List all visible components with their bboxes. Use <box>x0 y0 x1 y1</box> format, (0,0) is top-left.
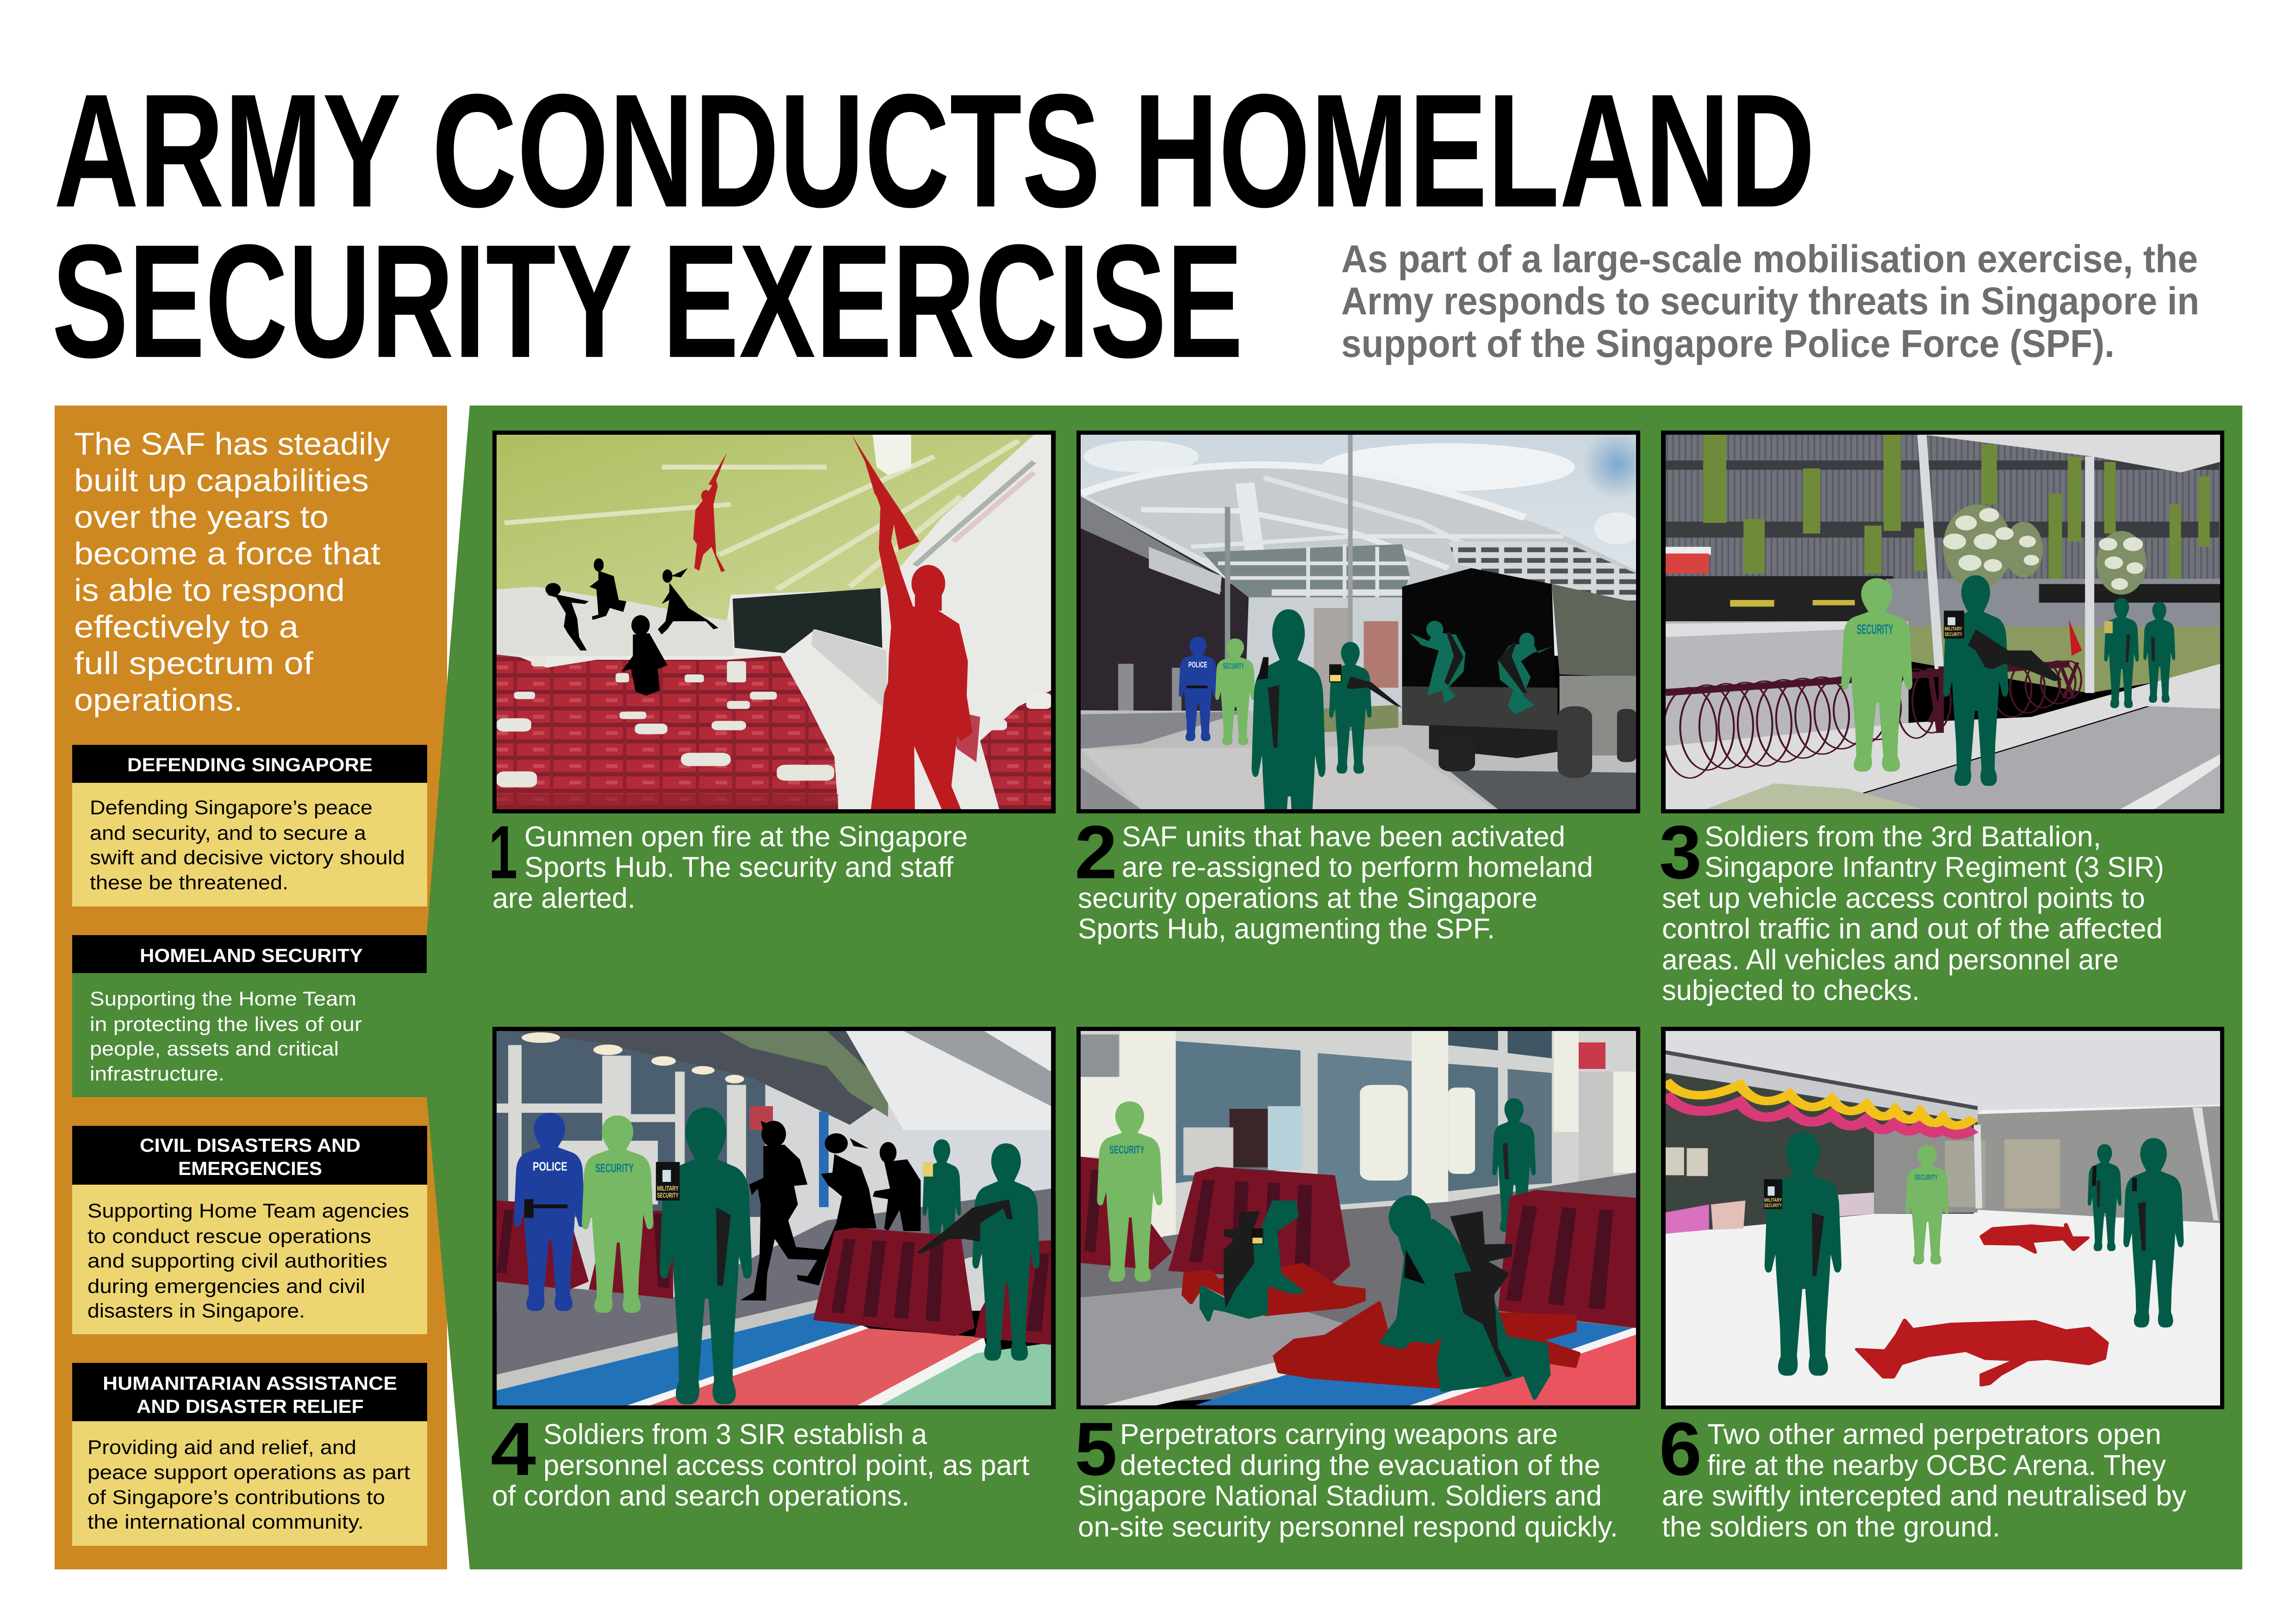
barriers <box>497 1200 1051 1345</box>
caption 1 <box>492 821 968 914</box>
card body: to conduct rescue operations <box>87 1225 371 1248</box>
figure: police officer: POLICE <box>1188 660 1207 669</box>
figure: background soldier <box>2088 1144 2122 1251</box>
figure: security officer <box>1842 578 1912 772</box>
caption 2 <box>1078 821 1593 945</box>
step number 6: 6 <box>1659 1406 1702 1491</box>
title: SECURITY EXERCISE <box>52 211 1243 391</box>
figure: security officer <box>582 1116 653 1313</box>
card heading: DEFENDING SINGAPORE <box>127 754 373 775</box>
figure: police officer <box>1179 637 1217 741</box>
card body: during emergencies and civil <box>87 1275 365 1298</box>
card body: Supporting Home Team agencies <box>87 1200 409 1222</box>
figures: subdued perpetrator and soldier, small <box>1183 1202 1364 1320</box>
card heading: AND DISASTER RELIEF <box>137 1396 364 1417</box>
panel: step 4 <box>481 1018 1083 1512</box>
card body: swift and decisive victory should <box>90 847 405 869</box>
barriers <box>1081 1156 1636 1328</box>
figure: soldier with armband: SECURITY <box>1764 1203 1782 1208</box>
caption 6: fire at the nearby OCBC Arena. They <box>1707 1449 2166 1481</box>
figure: soldier foreground <box>1251 609 1325 900</box>
figure: soldier with rifle: SECURITY <box>1945 631 1962 637</box>
scene: personnel access control point <box>481 1018 1083 1405</box>
panel: step 2 <box>1064 417 1666 945</box>
caption 6: Two other armed perpetrators open <box>1707 1418 2161 1450</box>
card body: peace support operations as part <box>87 1462 410 1484</box>
card: defending Singapore <box>72 745 427 906</box>
step number 3: 3 <box>1659 810 1702 894</box>
figure: near gunman with rifle <box>852 435 972 809</box>
caption 3: set up vehicle access control points to <box>1662 882 2145 914</box>
step number 2: 2 <box>1075 810 1117 894</box>
card body: of Singapore’s contributions to <box>87 1487 385 1509</box>
panel: step 5 <box>1064 1018 1666 1543</box>
card body <box>90 988 362 1085</box>
card body: people, assets and critical <box>90 1038 339 1060</box>
card body: infrastructure. <box>90 1063 224 1085</box>
card body <box>87 1200 409 1322</box>
figure: soldier with armband: MILITARY <box>1764 1197 1782 1203</box>
figure: background soldier <box>1492 1098 1536 1232</box>
intro text <box>74 426 390 718</box>
panel: step 1 <box>492 431 1056 908</box>
figure: police officer <box>514 1113 585 1311</box>
card: civil disasters and emergencies <box>72 1126 427 1334</box>
step number 1: 1 <box>489 810 517 894</box>
card heading: HOMELAND SECURITY <box>140 945 363 966</box>
card: homeland security <box>72 935 427 1097</box>
card body: these be threatened. <box>90 872 288 894</box>
icon: red flag <box>2069 620 2082 656</box>
card heading: EMERGENCIES <box>178 1158 322 1179</box>
panel: SAF capabilities sidebar <box>55 406 447 1569</box>
figures: fleeing civilians <box>545 558 718 696</box>
figure: security officer <box>1905 1145 1949 1264</box>
subtitle: As part of a large-scale mobilisation exercise, the <box>1341 237 2198 281</box>
scene: perpetrators detected at stadium <box>1064 1018 1666 1405</box>
figure: security officer: SECURITY <box>1857 622 1893 637</box>
caption 4: of cordon and search operations. <box>492 1480 909 1512</box>
card body: Supporting the Home Team <box>90 988 356 1010</box>
scene: soldiers deploying from truck at stadium <box>1064 417 1666 900</box>
scene: vehicle access control point <box>1648 417 2269 809</box>
figure: soldier with rifle: MILITARY <box>1945 626 1962 632</box>
figure: far gunman <box>693 452 727 572</box>
figures: subdued perpetrator and soldier, large <box>1275 1195 1579 1399</box>
caption 1: are alerted. <box>492 882 635 914</box>
subtitle: support of the Singapore Police Force (SPF). <box>1341 322 2115 365</box>
caption 4: Soldiers from 3 SIR establish a <box>543 1418 927 1450</box>
figure: soldier right <box>2123 1138 2184 1328</box>
figure: police officer: POLICE <box>533 1159 567 1173</box>
intro text: become a force that <box>74 536 380 571</box>
figure: soldier with rifle <box>917 1143 1040 1361</box>
subtitle <box>1341 237 2199 365</box>
card body: the international community. <box>87 1511 364 1533</box>
panel: step 6 <box>1648 1018 2249 1543</box>
figure: security officer: SECURITY <box>1223 662 1244 671</box>
panel: main green background <box>427 406 2242 1569</box>
caption 2: SAF units that have been activated <box>1122 821 1565 853</box>
card heading <box>140 1135 361 1179</box>
caption 3: control traffic in and out of the affected <box>1662 913 2163 945</box>
caption 2: security operations at the Singapore <box>1078 882 1537 914</box>
figure: security officer <box>1097 1101 1163 1282</box>
figure: soldier foreground: SECURITY <box>657 1191 678 1199</box>
barrier: central <box>813 1228 974 1336</box>
intro text: The SAF has steadily <box>74 426 390 462</box>
caption 5 <box>1078 1418 1618 1543</box>
figure: soldier foreground <box>656 1107 752 1405</box>
caption 2: are re-assigned to perform homeland <box>1122 851 1593 883</box>
intro text: is able to respond <box>74 573 345 608</box>
trees <box>1943 504 2147 595</box>
card heading: HUMANITARIAN ASSISTANCE <box>103 1373 397 1394</box>
intro text: full spectrum of <box>74 646 313 681</box>
card body: Providing aid and relief, and <box>87 1437 356 1459</box>
figures: evacuating civilians <box>740 1121 921 1301</box>
figure: security officer: SECURITY <box>1109 1143 1145 1156</box>
card body: disasters in Singapore. <box>87 1300 305 1322</box>
figure: soldier with armband <box>1764 1132 1842 1376</box>
caption 3: areas. All vehicles and personnel are <box>1662 944 2119 976</box>
figure: security officer: SECURITY <box>595 1161 634 1175</box>
caption 6: the soldiers on the ground. <box>1662 1511 2000 1543</box>
figure: security officer: SECURITY <box>1915 1173 1938 1181</box>
caption 3 <box>1662 821 2164 1006</box>
figure: soldier foreground: MILITARY <box>657 1184 678 1192</box>
card heading: CIVIL DISASTERS AND <box>140 1135 361 1156</box>
caption 5: detected during the evacuation of the <box>1120 1449 1600 1481</box>
subtitle: Army responds to security threats in Singapore in <box>1341 279 2199 323</box>
caption 3: subjected to checks. <box>1662 974 1920 1006</box>
figure: neutralised perpetrator far <box>1981 1224 2088 1252</box>
card body: Defending Singapore’s peace <box>90 797 373 819</box>
figures: soldiers jumping from truck <box>1410 621 1552 714</box>
caption 3: Soldiers from the 3rd Battalion, <box>1705 821 2101 853</box>
icon: barbed wire fence <box>1663 661 2081 778</box>
caption 6: are swiftly intercepted and neutralised by <box>1662 1480 2186 1512</box>
caption 3: Singapore Infantry Regiment (3 SIR) <box>1705 851 2164 883</box>
figure: neutralised perpetrator near <box>1857 1320 2107 1385</box>
caption 1: Gunmen open fire at the Singapore <box>524 821 968 853</box>
figures: two soldiers far <box>2104 598 2175 708</box>
intro text: built up capabilities <box>74 463 369 498</box>
panel: step 3 <box>1648 417 2269 1006</box>
card heading <box>103 1373 397 1417</box>
intro text: over the years to <box>74 500 329 535</box>
caption 6 <box>1662 1418 2186 1543</box>
caption 4: personnel access control point, as part <box>543 1449 1029 1481</box>
figure: background soldier <box>922 1139 961 1272</box>
figure: security officer <box>1215 638 1255 745</box>
caption 1: Sports Hub. The security and staff <box>524 851 954 883</box>
garland <box>1666 1081 1974 1134</box>
card body <box>87 1437 410 1533</box>
intro text: operations. <box>74 682 243 718</box>
caption 4 <box>492 1418 1029 1512</box>
scene: gunmen at stadium seats <box>497 435 1051 809</box>
card body <box>90 797 405 894</box>
figure: soldier with rifle <box>1943 575 2062 786</box>
figure: soldier with rifle <box>1329 642 1402 774</box>
card body: in protecting the lives of our <box>90 1013 362 1036</box>
card body: and supporting civil authorities <box>87 1250 387 1272</box>
caption 5: Singapore National Stadium. Soldiers and <box>1078 1480 1602 1512</box>
title <box>52 60 1815 391</box>
scene: OCBC Arena interception <box>1648 1018 2249 1435</box>
caption 2: Sports Hub, augmenting the SPF. <box>1078 913 1495 945</box>
step number 5: 5 <box>1075 1406 1117 1491</box>
intro text: effectively to a <box>74 609 299 644</box>
caption 5: Perpetrators carrying weapons are <box>1120 1418 1558 1450</box>
card: humanitarian assistance and disaster relief <box>72 1363 427 1546</box>
step number 4: 4 <box>491 1406 536 1491</box>
icon: army truck <box>1402 568 1636 778</box>
card body: and security, and to secure a <box>90 822 366 844</box>
caption 5: on-site security personnel respond quickly. <box>1078 1511 1618 1543</box>
